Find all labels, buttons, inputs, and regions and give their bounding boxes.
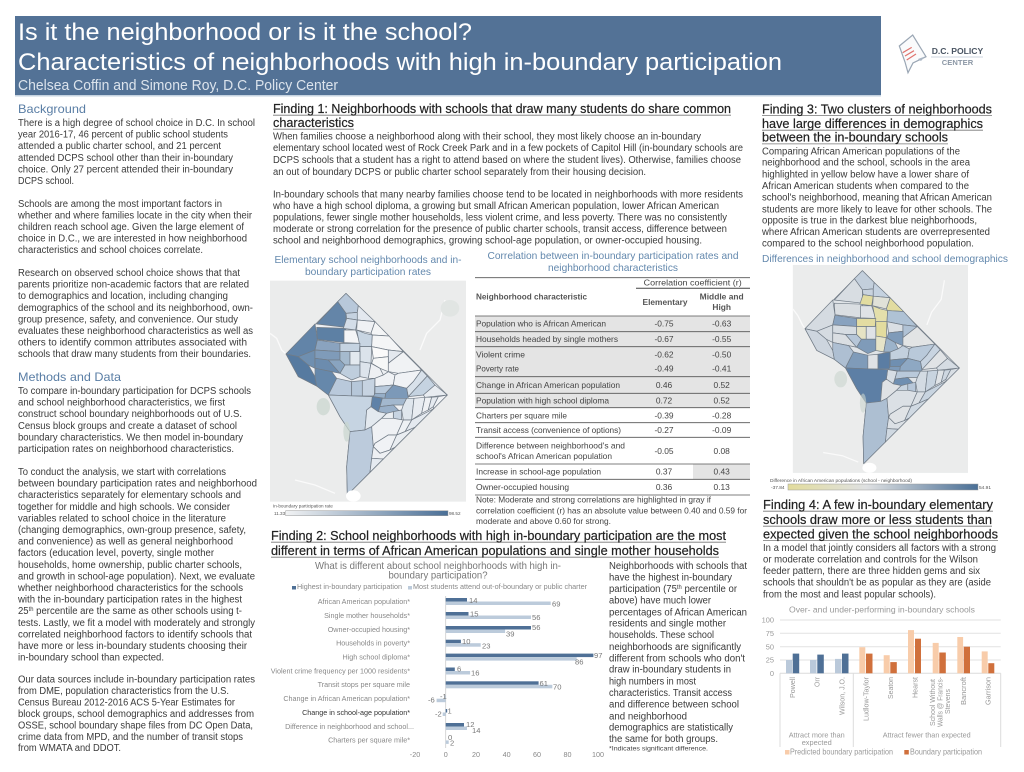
- table rows: Owner-occupied housing: [476, 482, 569, 492]
- table values: elementary: -0.05: [654, 446, 674, 456]
- school labels: [788, 676, 993, 727]
- text block: finding 1: [272, 132, 744, 246]
- text block: methods and data: together for middle and high schools. We consider: [18, 502, 231, 513]
- table rows: Increase in school-age population: [476, 467, 601, 477]
- panel: background and methods column: [17, 102, 257, 754]
- table rows: Transit access (convenience of options): [476, 425, 621, 435]
- map heading: differences: Differences in neighborhood and school demographics: [762, 254, 1008, 265]
- text block: background: choice in D.C., we are interested in how neighborhood: [18, 234, 247, 244]
- group labels: expected: [802, 738, 832, 747]
- logo: D.C. Policy Center: D.C. POLICY: [932, 46, 983, 56]
- value labels: 70: [553, 682, 561, 692]
- text block: background: characteristics and school choices correlate.: [18, 245, 203, 256]
- text block: finding 4: feeder pattern, there are three hidden gems and six: [763, 566, 980, 577]
- value labels: 10: [462, 637, 470, 646]
- chart title: [315, 561, 561, 582]
- value labels: 56: [532, 623, 540, 632]
- category labels: Change in school-age population*: [302, 708, 410, 717]
- table values: elementary: 0.37: [656, 467, 672, 477]
- table rows: Difference between neighborhood's and: [476, 440, 625, 450]
- category labels: High school diploma*: [342, 652, 410, 662]
- text block: methods and data: from DME, population characteristics from the U.S.: [18, 686, 229, 697]
- heading: finding 2: different in terms of African American populations and single mother households: [271, 543, 719, 558]
- table note: moderate and above 0.60 for strong.: [476, 516, 611, 526]
- text block: finding 4: In a model that jointly considers all factors with a strong: [763, 543, 996, 554]
- y axis labels: 0: [770, 669, 774, 678]
- table header: High: [712, 302, 731, 312]
- heading: finding 4: Finding 4: A few in-boundary elementary: [763, 497, 993, 512]
- heading: finding 3: Finding 3: Two clusters of neighborhoods: [762, 101, 992, 116]
- heading: finding 3: [762, 101, 992, 145]
- table values: elementary: -0.27: [654, 425, 674, 435]
- map legend: in-boundary participation rate: In-boundary participation rate: [273, 504, 333, 508]
- category labels: Charters per square mile*: [328, 736, 410, 744]
- table note: [476, 494, 747, 526]
- heading: finding 2: [271, 528, 726, 558]
- value labels: 2: [450, 738, 454, 748]
- table values: middle and high: -0.50: [712, 349, 732, 359]
- text block: finding 3: Comparing African American populations of the: [762, 146, 961, 157]
- school labels: Seaton: [886, 677, 895, 699]
- text block: finding 2: th: [677, 585, 682, 591]
- text block: finding 2: and neighborhood: [609, 711, 687, 722]
- text block: methods and data: OSSE, school boundary shape files from DC Open Data,: [18, 720, 253, 732]
- school labels: Hearst: [910, 677, 919, 698]
- text block: methods and data: and school neighborhood characteristics, we first: [18, 398, 225, 408]
- heading: finding 4: [763, 497, 998, 541]
- heading: finding 1: Finding 1: Neighborhoods with schools that draw many students do share common: [273, 101, 731, 116]
- map legend: difference in African American populations: -37.84: [771, 485, 785, 491]
- text block: finding 1: who have a high school diploma, a growing but small African American population, lower African American: [272, 201, 719, 212]
- text block: finding 2: draw in-boundary students in: [609, 665, 731, 676]
- text block: methods and data: Census Bureau 2012-2016 ACS 5-Year Estimates for: [18, 698, 236, 708]
- chart legend: [785, 746, 982, 756]
- value labels: [428, 596, 602, 748]
- table heading: correlation: neighborhood characteristics: [548, 263, 678, 274]
- text block: finding 3: opposite is true in the darkest blue neighborhoods,: [762, 216, 977, 227]
- x axis labels: 60: [533, 750, 541, 759]
- text block: background: schools that draw many students from their boundaries.: [18, 349, 251, 360]
- table rows: Change in African American population: [476, 380, 620, 390]
- school labels: Garrison: [984, 677, 993, 705]
- value labels: 56: [532, 613, 540, 622]
- text block: background: children reach school age. Given the large element of: [18, 222, 244, 233]
- heading: background: Background: [18, 102, 86, 116]
- heading: methods and data: Methods and Data: [18, 370, 121, 384]
- text block: finding 2: characteristics. Transit access: [609, 688, 732, 699]
- school labels: Ludlow-Taylor: [862, 676, 871, 721]
- text block: finding 1: populations, fewer single mother households, less violent crime, and less poverty. There was no consistently: [273, 212, 727, 224]
- text block: methods and data: construct school boundary neighborhoods out of U.S.: [18, 409, 242, 420]
- heading: finding 4: expected given the school neighborhoods: [763, 526, 998, 541]
- chart title: What is different about school neighborhoods with high in-: [315, 561, 561, 572]
- map legend: in-boundary participation rate: [273, 504, 461, 516]
- value labels: 97: [594, 651, 602, 660]
- map heading: elementary school neighborhoods: Elementary school neighborhoods and in-: [274, 255, 462, 266]
- text block: finding 2: percentages of African American: [609, 607, 747, 618]
- text block: finding 1: In-boundary schools that many nearby families choose tend to be located in neighborhoods with more residents: [273, 190, 743, 200]
- value labels: 15: [470, 610, 478, 618]
- table values: elementary: -0.39: [654, 410, 674, 420]
- heading: finding 2: Finding 2: School neighborhoods with high in-boundary participation are the most: [271, 528, 726, 543]
- table header: Neighborhood characteristic: [476, 292, 587, 302]
- value labels: 69: [552, 600, 560, 608]
- map: differences in African American population: [793, 265, 968, 473]
- value labels: 39: [506, 630, 514, 638]
- school labels: Powell: [788, 677, 797, 698]
- x axis labels: [410, 750, 604, 759]
- text block: background: Research on observed school choice shows that that: [18, 268, 240, 279]
- text block: methods and data: To conduct the analysis, we start with correlations: [18, 467, 226, 478]
- category labels: Transit stops per square mile: [318, 680, 410, 689]
- text block: finding 2: the same for both groups.: [609, 734, 718, 745]
- table values: elementary: [654, 318, 674, 492]
- table rows: school's African American population: [476, 451, 612, 461]
- text block: finding 2: participation (75: [609, 584, 679, 595]
- text block: finding 2: have the highest in-boundary: [609, 573, 732, 584]
- school labels: Bancroft: [959, 677, 968, 705]
- chart legend: Highest in-boundary participation: [297, 582, 402, 591]
- text block: finding 2: demographics are statistically: [609, 723, 733, 734]
- x axis labels: 80: [564, 750, 572, 759]
- value labels: 6: [457, 664, 461, 674]
- table note: correlation coefficient (r) has an absolute value between 0.40 and 0.59 for: [476, 505, 747, 515]
- category labels: [271, 597, 414, 744]
- value labels: -6: [428, 696, 435, 704]
- heading: finding 3: have large differences in demographics: [762, 116, 983, 131]
- table values: middle and high: 0.13: [714, 482, 730, 492]
- text block: finding 2: different from schools who don't: [609, 653, 745, 664]
- table values: middle and high: 0.08: [714, 446, 730, 456]
- school labels: Wilson, J.O.: [838, 677, 846, 715]
- bar chart: school neighborhood characteristics: [271, 596, 604, 759]
- school labels: Stevens: [943, 689, 952, 714]
- text block: methods and data: tests. Lastly, we fit a model with moderately and strongly: [18, 618, 255, 629]
- map heading: elementary school neighborhoods: [274, 255, 462, 278]
- value labels: 12: [466, 720, 474, 729]
- text block: methods and data: in-boundary school than expected.: [18, 652, 164, 664]
- chart: over- and under-performing schools: [762, 604, 1001, 756]
- map heading: elementary school neighborhoods: boundary participation rates: [305, 267, 431, 278]
- table rows: Population who is African American: [476, 318, 606, 328]
- table values: middle and high: -0.28: [712, 410, 732, 420]
- text block: background: attended a public charter school, and 21 percent: [18, 141, 221, 152]
- school labels: Walls @ Francis-: [936, 677, 944, 727]
- y axis labels: [762, 616, 774, 678]
- table values: middle and high: 0.52: [714, 380, 730, 390]
- table values: elementary: -0.49: [654, 364, 674, 374]
- text block: finding 2: percentile or: [682, 584, 738, 595]
- text block: methods and data: Census block groups and create a dataset of school: [18, 421, 237, 432]
- group labels: Attract fewer than expected: [883, 731, 971, 740]
- bars: attract fewer than expected: [859, 630, 994, 673]
- value labels: 61: [540, 679, 548, 688]
- text block: finding 3: where African American students are overrepresented: [761, 227, 990, 238]
- table values: middle and high: [712, 318, 732, 492]
- text block: background: attended DCPS school other than their in-boundary: [18, 153, 233, 164]
- category labels: Change in African American population*: [283, 694, 410, 703]
- text block: background: year 2016-17, 46 percent of public school students: [18, 130, 228, 140]
- map legend: difference in African American populations: [770, 478, 991, 491]
- value labels: 86: [575, 658, 583, 666]
- panel: finding 3: [761, 101, 1008, 491]
- value labels: 16: [471, 668, 479, 678]
- table values: elementary: -0.67: [654, 334, 674, 344]
- text block: background: parents prioritize non-academic factors that are related: [18, 280, 249, 290]
- text block: background: evaluates these neighborhood characteristics as well as: [18, 326, 253, 337]
- map legend: difference in African American populations: 54.91: [979, 485, 991, 491]
- x axis labels: 100: [592, 750, 604, 759]
- bars: highest in-boundary participation: [444, 598, 593, 726]
- title: Is it the neighborhood or is it the school?: [18, 19, 472, 46]
- chart legend: [292, 582, 588, 591]
- table values: middle and high: 0.52: [714, 396, 730, 406]
- text block: methods and data: crime data from MPD, and the number of transit stops: [18, 732, 243, 743]
- text block: background: choice. Only 27 percent attended their in-boundary: [18, 164, 233, 176]
- text block: finding 4: or moderate correlation and controls for the Wilson: [763, 555, 978, 566]
- bars: attract more than expected: [786, 654, 848, 673]
- chart legend: Most students attend out-of-boundary or public charter: [413, 582, 588, 591]
- text block: background: DCPS school.: [18, 176, 74, 187]
- header banner: [15, 16, 881, 96]
- text block: methods and data: [17, 386, 257, 754]
- value labels: 1: [448, 706, 452, 716]
- value labels: 23: [482, 642, 490, 650]
- text block: methods and data: boundary characteristics. We then model in-boundary: [18, 432, 243, 444]
- text block: methods and data: households, home ownership, public charter schools,: [18, 560, 242, 571]
- text block: finding 1: elementary school located west of Rock Creek Park and in a few pockets of Capitol Hill (in-boundary schools are: [273, 143, 744, 154]
- table rows: [476, 318, 625, 492]
- heading: finding 1: characteristics: [273, 115, 354, 130]
- x axis labels: 0: [444, 750, 448, 759]
- text block: background: group presence, safety, and convenience. Our study: [18, 314, 238, 326]
- text block: methods and data: factors (education level, poverty, single mother: [18, 548, 215, 559]
- table values: middle and high: -0.09: [712, 425, 732, 435]
- text block: finding 2: households. These school: [609, 630, 714, 641]
- y axis labels: 75: [766, 629, 774, 638]
- value labels: 0: [448, 733, 452, 742]
- table values: elementary: 0.72: [656, 396, 672, 406]
- school labels: Orr: [813, 676, 822, 687]
- value labels: -2: [435, 710, 442, 718]
- text block: background: others to identify common attributes associated with: [18, 338, 247, 348]
- panel: finding 2: [271, 528, 747, 759]
- y axis labels: 100: [762, 616, 774, 624]
- text block: finding 2: [609, 561, 747, 745]
- text block: finding 1: moderate or strong correlation for the presence of public charter schools, transit access, difference between: [273, 224, 727, 235]
- table values: elementary: 0.46: [656, 380, 672, 390]
- text block: finding 2: above) have much lower: [609, 596, 712, 607]
- table header: Elementary: [642, 297, 688, 307]
- text block: methods and data: block groups, school demographics and addresses from: [18, 709, 254, 720]
- text block: background: whether and where families locate in the city when their: [17, 210, 253, 222]
- chart legend: Predicted boundary participation: [790, 746, 893, 756]
- category labels: Violent crime frequency per 1000 residents*: [271, 666, 410, 676]
- heading: finding 4: schools draw more or less students than: [763, 512, 992, 527]
- text block: finding 2: high numbers in most: [609, 677, 696, 688]
- text block: methods and data: (changing demographics, own-group presence, safety,: [18, 525, 246, 536]
- x axis labels: 20: [472, 750, 480, 759]
- text block: background: There is a high degree of school choice in D.C. In school: [18, 118, 255, 129]
- text block: background: Schools are among the most important factors in: [18, 199, 222, 210]
- text block: methods and data: th: [29, 607, 34, 613]
- text block: finding 4: [763, 543, 996, 600]
- table heading: correlation: [488, 251, 739, 274]
- y axis labels: 50: [766, 642, 774, 652]
- text block: finding 2: and difference between school: [609, 700, 739, 711]
- text block: finding 1: When families choose a neighborhood along with their school, they most likely choose an in-boundary: [273, 132, 701, 142]
- chart title: Over- and under-performing in-boundary schools: [789, 604, 975, 614]
- text block: finding 4: from the most and least popular schools).: [763, 589, 936, 600]
- text block: methods and data: To compare in-boundary participation for DCPS schools: [18, 386, 251, 397]
- text block: finding 1: school and neighborhood demographics, growing school-age population, or owner-occupied housing.: [273, 236, 702, 246]
- panel: finding 1: [272, 101, 744, 246]
- text block: finding 2: Neighborhoods with schools that: [609, 561, 747, 572]
- category labels: Difference in neighborhood and school...: [285, 722, 414, 731]
- text block: finding 3: [761, 146, 993, 250]
- authors: Chelsea Coffin and Simone Roy, D.C. Policy Center: [18, 78, 338, 94]
- map legend: in-boundary participation rate: 11.33: [274, 511, 286, 516]
- group labels: [789, 731, 971, 747]
- text block: methods and data: with the in-boundary participation rates in the highest: [17, 594, 242, 606]
- table values: elementary: -0.75: [654, 318, 674, 328]
- chart title: boundary participation?: [388, 570, 488, 582]
- map legend: in-boundary participation rate: 98.52: [449, 511, 461, 516]
- text block: background: to demographics and location, including changing: [18, 291, 228, 302]
- panel: finding 4: [762, 497, 1001, 756]
- table rows: Households headed by single mothers: [476, 334, 618, 344]
- text block: finding 3: African American students when compared to the: [762, 181, 970, 192]
- school labels: School Without: [928, 679, 937, 726]
- table values: elementary: 0.36: [656, 482, 672, 492]
- text block: background: [17, 118, 255, 360]
- text block: finding 2: residents and single mother: [609, 619, 727, 630]
- text block: methods and data: whether neighborhood characteristics for the schools: [17, 583, 243, 594]
- text block: methods and data: and growth in school-age population). Next, we evaluate: [18, 572, 256, 582]
- value labels: -1: [440, 692, 447, 701]
- category labels: African American population*: [318, 597, 410, 606]
- text block: finding 3: compared to the school neighborhood population.: [762, 239, 974, 250]
- heading: finding 3: between the in-boundary schools: [762, 130, 948, 145]
- text block: methods and data: variables related to school choice in the literature: [18, 514, 227, 524]
- table header: [476, 278, 744, 312]
- y axis labels: 25: [766, 656, 774, 664]
- text block: finding 2: neighborhoods are significantly: [609, 642, 741, 653]
- text block: methods and data: 25: [18, 606, 29, 617]
- text block: methods and data: participation rates on neighborhood characteristics.: [18, 444, 234, 455]
- x axis labels: 40: [503, 750, 511, 759]
- table values: middle and high: -0.55: [712, 334, 732, 344]
- map: in-boundary participation rates: [270, 281, 466, 502]
- logo: D.C. Policy Center: CENTER: [942, 58, 974, 67]
- text block: finding 3: school's neighborhood, meaning that African American: [762, 192, 992, 203]
- map legend: difference in African American populations: Difference in African American populations (school - neighborhood): [770, 478, 912, 484]
- title: [18, 19, 782, 76]
- text block: methods and data: from WMATA and DDOT.: [18, 743, 121, 754]
- text block: finding 4: schools that shouldn't be as popular as they are (aside: [763, 577, 992, 588]
- category labels: Single mother households*: [324, 611, 410, 620]
- correlation table: [475, 278, 750, 526]
- chart legend: Boundary participation: [910, 746, 982, 756]
- table note: Note: Moderate and strong correlations are highlighted in gray if: [476, 494, 712, 504]
- text block: methods and data: between boundary participation rates and neighborhood: [18, 478, 257, 490]
- title: Characteristics of neighborhoods with high in-boundary participation: [18, 49, 782, 76]
- value labels: 14: [469, 596, 477, 605]
- table values: middle and high: -0.41: [712, 364, 732, 374]
- table header: Middle and: [700, 291, 744, 301]
- table rows: Population with high school diploma: [476, 396, 609, 406]
- text block: finding 1: DCPS schools that a student has a right to attend based on where the student lives). Otherwise, families choose: [273, 155, 742, 166]
- text block: methods and data: correlated neighborhood factors to identify schools that: [18, 630, 252, 640]
- text block: finding 1: an out of boundary DCPS or public charter school separately from their housing decision.: [273, 167, 646, 178]
- table values: middle and high: -0.63: [712, 318, 732, 328]
- text block: background: demographics of the school and its neighborhood, own-: [18, 303, 253, 314]
- text block: methods and data: Our data sources include in-boundary participation rates: [18, 674, 255, 686]
- text block: finding 3: students are more likely to leave for other schools. The: [762, 204, 993, 215]
- group labels: Attract more than: [789, 731, 845, 740]
- table header: Correlation coefficient (r): [644, 278, 742, 288]
- text block: methods and data: and convenience) as well as general neighborhood: [18, 536, 233, 548]
- table rows: Poverty rate: [476, 364, 519, 374]
- heading: finding 1: [273, 101, 731, 130]
- x axis labels: -20: [410, 750, 420, 759]
- table rows: Violent crime: [476, 349, 525, 359]
- table values: elementary: -0.62: [654, 349, 674, 359]
- bars: most students attend out-of-boundary or charter: [437, 602, 577, 744]
- table rows: Charters per square mile: [476, 410, 567, 420]
- text block: finding 3: neighborhood and the school, schools in the area: [762, 158, 971, 169]
- text block: methods and data: have more or less in-boundary students choosing their: [18, 641, 248, 652]
- text block: methods and data: percentile are the same as other schools using t-: [34, 606, 242, 617]
- value labels: 14: [472, 726, 480, 735]
- table heading: correlation: Correlation between in-boundary participation rates and: [488, 251, 739, 262]
- category labels: Households in poverty*: [336, 638, 410, 648]
- footnote: *Indicates significant difference.: [609, 746, 708, 752]
- text block: methods and data: characteristics separately for elementary schools and: [18, 490, 241, 501]
- table values: middle and high: 0.43: [714, 467, 730, 477]
- logo: D.C. Policy Center: [899, 35, 983, 73]
- category labels: Owner-occupied housing*: [328, 625, 410, 634]
- text block: finding 3: highlighted in yellow below have a lower share of: [762, 169, 969, 180]
